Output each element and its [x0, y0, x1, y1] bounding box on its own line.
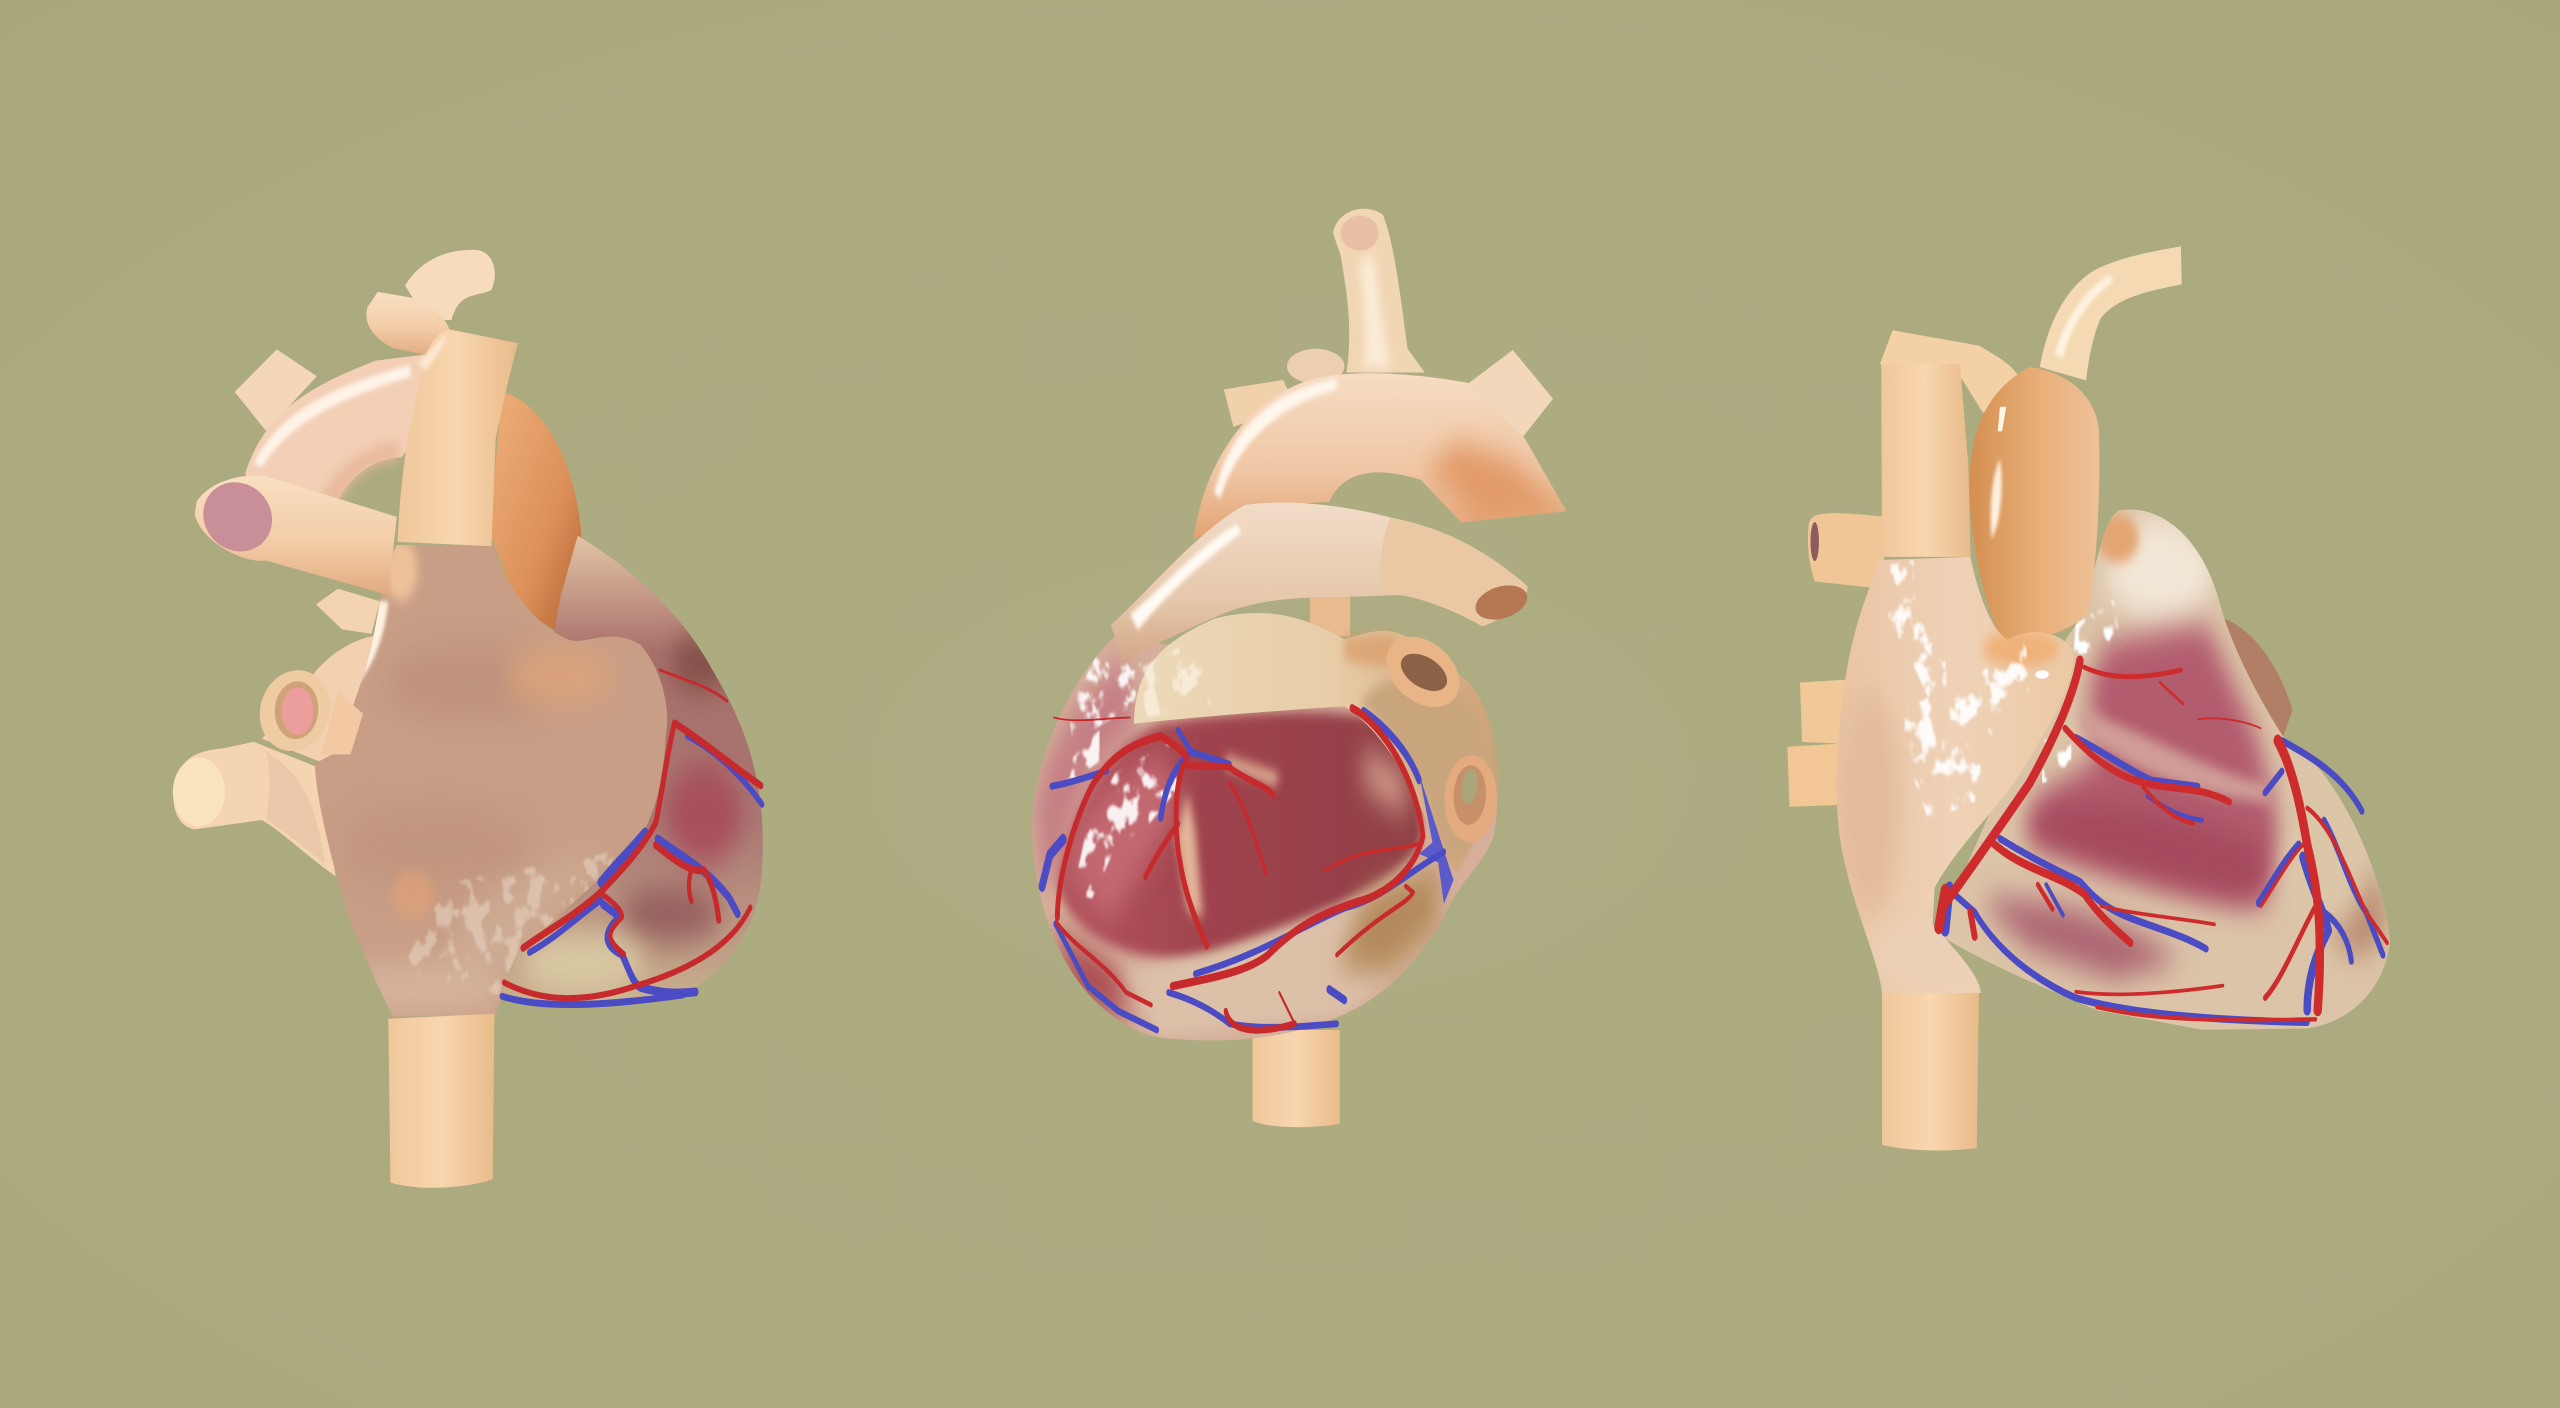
top curved vessel [2040, 246, 2182, 380]
pale great vessel [398, 329, 518, 546]
red arteries [1054, 708, 1423, 1030]
pulmonary opening [1474, 580, 1528, 625]
orange aorta [489, 392, 582, 640]
ventricle [502, 536, 763, 1006]
coronary vessels [1939, 661, 2387, 1022]
lower left vessels [1787, 679, 1850, 807]
left flange [1224, 380, 1295, 427]
coronary vessels [502, 670, 762, 1005]
opening: upper [1382, 625, 1464, 719]
top vessel opening [1341, 216, 1379, 251]
blue veins [502, 736, 762, 1005]
ventricle [1937, 510, 2390, 1030]
right atrium body [315, 539, 667, 1017]
aortic arch [245, 354, 426, 514]
aortic arch [1193, 373, 1566, 539]
red arteries [1939, 661, 2387, 1020]
superior vena cava [1881, 364, 1970, 557]
ventricles [1032, 636, 1498, 1040]
small left vessel [1808, 513, 1886, 589]
pale glossy patch [401, 851, 616, 995]
opening: lower [1439, 745, 1503, 852]
heart: centre view [1032, 209, 1566, 1127]
lower vena cava [1882, 993, 1979, 1150]
right atrium body [1836, 557, 2073, 993]
red arteries [504, 670, 761, 998]
coronary vessels [1042, 708, 1453, 1030]
rear vessel stub [1310, 592, 1350, 636]
atrium [1134, 613, 1503, 874]
blue veins [1945, 738, 2383, 1022]
heart: left view [173, 250, 763, 1188]
upper stub vessel [366, 292, 450, 356]
pulmonary vessel [1111, 503, 1528, 661]
lower vena cava [388, 1014, 494, 1188]
lower left vessels [173, 636, 376, 876]
specular highlights [1888, 560, 2049, 820]
rear ventricle bump [2223, 618, 2292, 741]
vessel opening: ringed [255, 662, 334, 759]
lower vena cava [1253, 1030, 1340, 1127]
vessel opening: cream [173, 758, 225, 826]
blue veins [1042, 711, 1453, 1030]
left flange [235, 349, 317, 431]
top vessel [1333, 209, 1425, 372]
small rear vessel [316, 589, 380, 634]
right flange [1469, 350, 1553, 438]
specular highlights [1064, 656, 1178, 899]
heart: right view [1787, 246, 2390, 1150]
rear bump [1287, 349, 1344, 384]
wide blue strap [1419, 774, 1453, 904]
upper curved vessel [405, 250, 495, 320]
orange aorta [1970, 367, 2099, 640]
illustration: three views of an anatomical heart [172, 208, 2390, 1188]
rear stub vessel [1880, 330, 2021, 413]
pink-lined vessel [195, 475, 397, 595]
